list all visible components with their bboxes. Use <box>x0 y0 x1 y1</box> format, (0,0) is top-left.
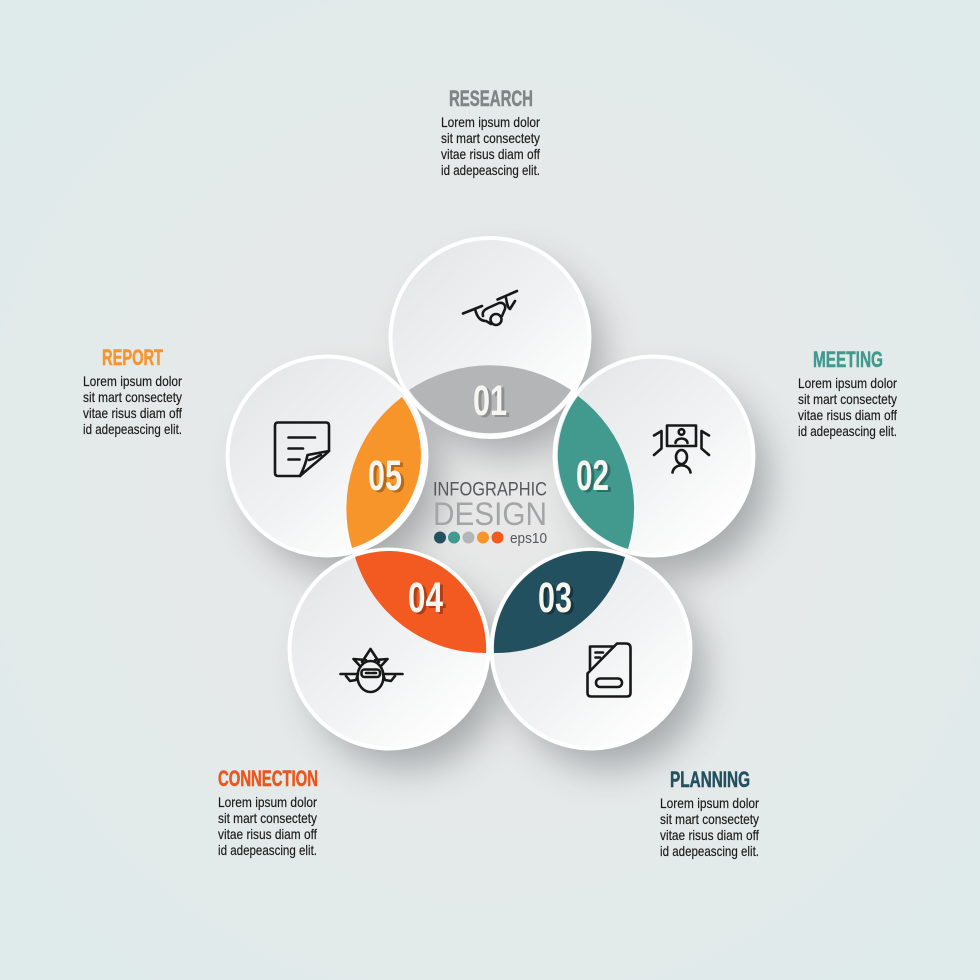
icon: airplane <box>340 649 402 692</box>
text block: research: Lorem ipsum dolor <box>441 114 540 130</box>
text block: report: REPORT <box>102 345 163 370</box>
number 05: 05 <box>368 452 402 500</box>
text block: connection <box>218 766 318 858</box>
text block: planning: PLANNING <box>670 767 750 792</box>
number 01: 01 <box>476 379 510 427</box>
text block: research: id adepeascing elit. <box>441 162 540 178</box>
text block: meeting: MEETING <box>813 347 883 372</box>
panel: circle 04 connection <box>290 550 488 748</box>
panel: circle 03 planning <box>492 550 690 748</box>
icon: folder document <box>588 644 630 696</box>
number 04: 04 <box>408 574 443 622</box>
icon: note page <box>275 422 329 476</box>
text block: research: sit mart consectety <box>441 130 540 146</box>
text block: meeting <box>798 347 897 439</box>
text block: meeting: sit mart consectety <box>798 391 897 407</box>
number 05: 05 <box>371 454 405 502</box>
number 03: 03 <box>541 576 575 624</box>
text block: connection: sit mart consectety <box>218 810 317 826</box>
text block: report: sit mart consectety <box>83 389 182 405</box>
text block: research: vitae risus diam off <box>441 146 540 162</box>
text block: connection: id adepeascing elit. <box>218 842 317 858</box>
text block: meeting: vitae risus diam off <box>798 407 897 423</box>
number 02: 02 <box>576 452 609 500</box>
text block: planning <box>660 767 759 859</box>
text block: report: id adepeascing elit. <box>83 421 182 437</box>
text block: research <box>441 86 540 178</box>
text block: connection: Lorem ipsum dolor <box>218 794 317 810</box>
icon: video meeting <box>654 426 709 472</box>
text block: research: RESEARCH <box>449 86 533 111</box>
text block: report <box>83 345 182 437</box>
hexagon colour dots <box>434 532 504 544</box>
panel: circle 02 meeting <box>554 356 754 556</box>
text block: meeting: Lorem ipsum dolor <box>798 375 897 391</box>
center title: eps10 <box>510 530 547 547</box>
text block: report: vitae risus diam off <box>83 405 182 421</box>
number 04: 04 <box>411 576 446 624</box>
number 03: 03 <box>538 574 572 622</box>
text block: meeting: id adepeascing elit. <box>798 423 897 439</box>
panel: circle 05 report <box>228 356 426 556</box>
center title: DESIGN <box>433 496 547 532</box>
circle shadows <box>248 262 768 768</box>
text block: planning: sit mart consectety <box>660 811 759 827</box>
text block: report: Lorem ipsum dolor <box>83 373 182 389</box>
center title <box>433 480 547 547</box>
text block: connection: vitae risus diam off <box>218 826 317 842</box>
number 02: 02 <box>579 454 612 502</box>
number 01: 01 <box>473 377 507 425</box>
center title: INFOGRAPHIC <box>433 480 547 500</box>
panel: circle 01 research <box>390 238 590 437</box>
text block: planning: id adepeascing elit. <box>660 843 759 859</box>
text block: planning: Lorem ipsum dolor <box>660 795 759 811</box>
icon: drone <box>463 291 517 325</box>
text block: planning: vitae risus diam off <box>660 827 759 843</box>
text block: connection: CONNECTION <box>218 766 318 791</box>
